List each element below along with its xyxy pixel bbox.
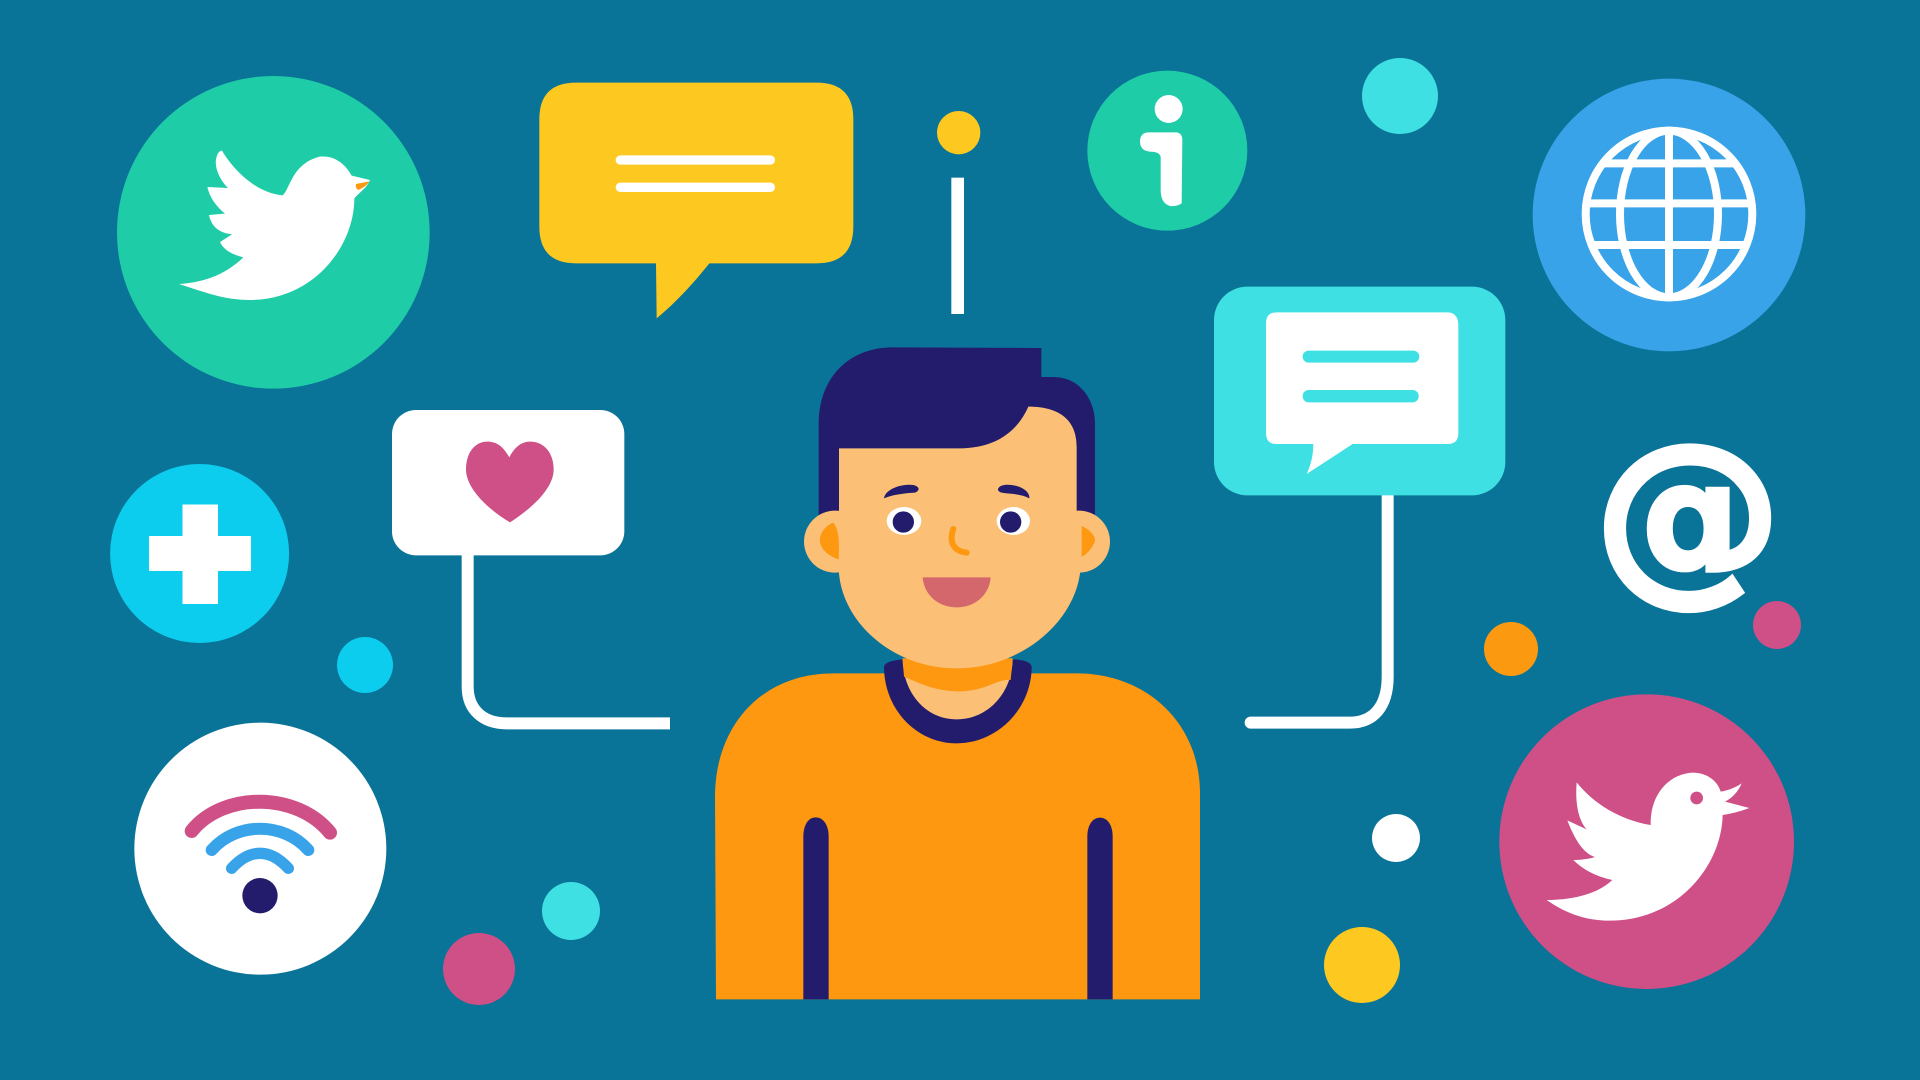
eyebrows <box>884 485 919 498</box>
icon: at sign: @ <box>1594 404 1782 623</box>
eyes <box>887 507 921 535</box>
hair <box>819 347 1095 517</box>
speech bubble: white with heart <box>392 410 670 723</box>
decorative dot: pink right <box>1753 601 1801 649</box>
icon: green circle with bird <box>117 76 430 389</box>
decorative dot: white <box>1372 814 1420 862</box>
decorative dot: pink bottom <box>443 933 515 1005</box>
head and collar <box>804 347 1110 743</box>
collar <box>884 659 1032 743</box>
connector: left elbow <box>468 553 670 723</box>
neck shadow <box>903 658 1013 691</box>
face <box>839 407 1080 668</box>
person <box>715 347 1200 999</box>
decorative dot: teal top <box>1362 58 1438 134</box>
shirt <box>715 673 1200 999</box>
neck <box>903 658 1013 719</box>
icon: pink circle with singing bird <box>1499 694 1794 989</box>
decorative dot: yellow <box>1324 927 1400 1003</box>
connector: right elbow <box>1251 487 1388 723</box>
ears <box>804 511 866 573</box>
icon: wifi circle <box>134 723 386 975</box>
decorative dot: teal bottom <box>542 882 600 940</box>
nose <box>952 529 967 553</box>
speech bubble: teal with white message <box>1214 287 1505 723</box>
decorative dot: cyan <box>337 637 393 693</box>
yellow dot and vertical connector <box>937 111 980 314</box>
icon: plus circle <box>110 464 289 643</box>
icon: info circle <box>1087 71 1247 231</box>
speech bubble: yellow <box>539 83 853 318</box>
decorative dot: orange <box>1484 622 1538 676</box>
mouth <box>923 577 991 607</box>
icon: globe <box>1533 79 1805 351</box>
